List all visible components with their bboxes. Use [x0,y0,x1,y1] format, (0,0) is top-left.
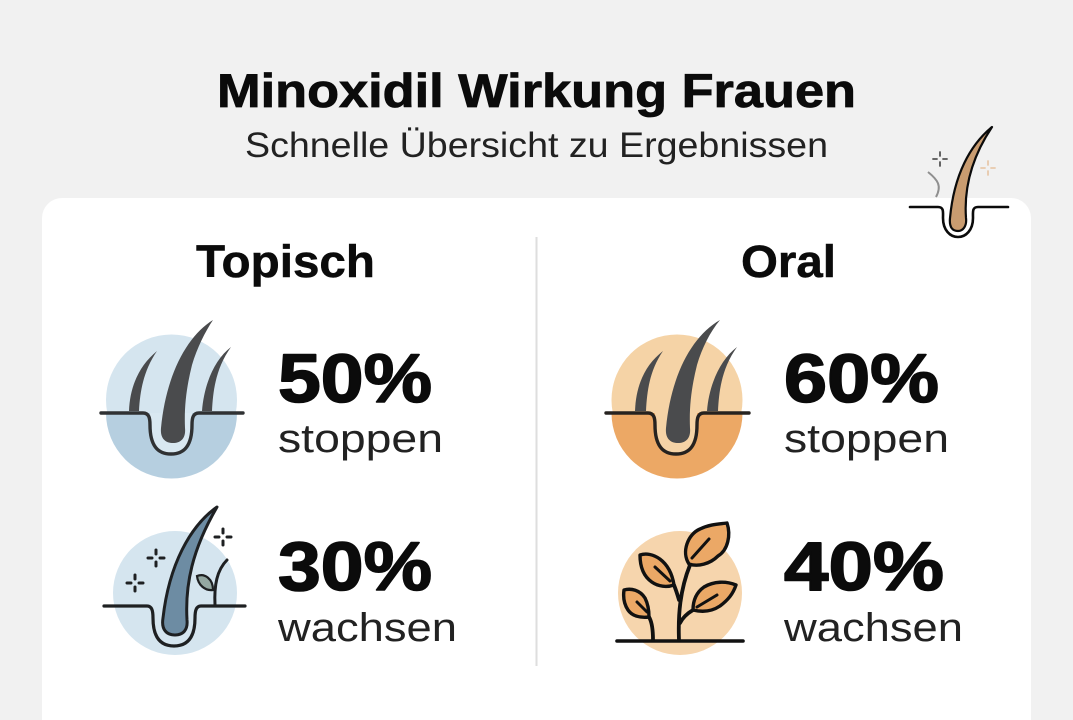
stat: 60% stoppen [784,340,949,461]
stat: 30% wachsen [277,528,457,650]
icon: topical hair growth [104,507,245,655]
stat: 40% wachsen: 40% [784,528,944,605]
divider [536,237,538,666]
stat: 40% wachsen [783,528,963,650]
subtitle: Schnelle Übersicht zu Ergebnissen [245,126,828,165]
icon: plant growth [617,523,743,655]
stat: 50% stoppen: 50% [278,340,432,417]
icon: topical hair stop [101,320,243,478]
heading: Topisch: Topisch [196,236,375,287]
title: Minoxidil Wirkung Frauen [217,64,856,117]
panel: white card [42,198,1031,720]
stat: 30% wachsen: wachsen [277,606,457,650]
heading: Oral: Oral [741,236,836,287]
stat: 30% wachsen: 30% [278,528,432,605]
stat: 60% stoppen: 60% [784,340,939,417]
stat: 50% stoppen: stoppen [278,417,443,461]
stat: 60% stoppen: stoppen [784,417,949,461]
stat: 40% wachsen: wachsen [783,606,963,650]
icon: hair follicle corner [910,127,1008,237]
stat: 50% stoppen [278,340,443,461]
icon: oral hair stop [606,320,749,478]
